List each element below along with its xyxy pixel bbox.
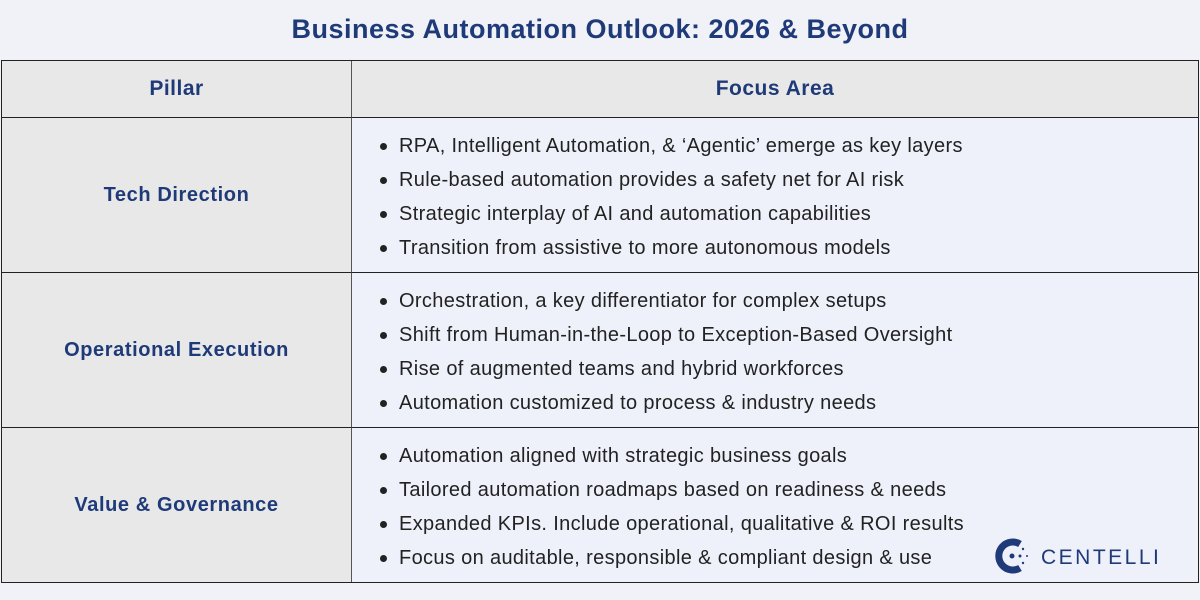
row items: value & governance: Automation aligned with strategic business goals — [399, 445, 847, 467]
row items: value & governance: Focus on auditable, responsible & compliant design & use — [399, 547, 932, 569]
row items: operational execution — [352, 273, 1198, 428]
header: pillar: Pillar — [149, 77, 204, 100]
row items: value & governance: Tailored automation roadmaps based on readiness & needs — [399, 479, 946, 501]
row label: value & governance — [2, 428, 352, 582]
row items: operational execution: Shift from Human-in-the-Loop to Exception-Based Oversight — [399, 324, 953, 346]
header: focus area: Focus Area — [716, 77, 834, 100]
row items: tech direction: Rule-based automation provides a safety net for AI risk — [399, 169, 904, 191]
row items: operational execution: Orchestration, a key differentiator for complex setups — [399, 290, 887, 312]
row label: tech direction — [2, 118, 352, 273]
logo: centelli — [995, 538, 1158, 574]
row items: tech direction — [352, 118, 1198, 273]
row items: tech direction: RPA, Intelligent Automation, & ‘Agentic’ emerge as key layers — [399, 135, 963, 157]
row items: operational execution: Automation customized to process & industry needs — [399, 392, 876, 414]
row label: value & governance: Value & Governance — [74, 494, 279, 516]
row label: tech direction: Tech Direction — [104, 184, 249, 206]
title: Business Automation Outlook: 2026 & Beyond — [291, 14, 909, 44]
row label: operational execution — [2, 273, 352, 428]
header: pillar — [2, 61, 352, 118]
row items: value & governance — [352, 428, 1198, 582]
row items: operational execution: Rise of augmented teams and hybrid workforces — [399, 358, 844, 380]
logo: centelli: CENTELLI — [1041, 546, 1158, 569]
row items: tech direction: Transition from assistive to more autonomous models — [399, 237, 891, 259]
row items: value & governance: Expanded KPIs. Include operational, qualitative & ROI results — [399, 513, 964, 535]
header: focus area — [352, 61, 1198, 118]
row items: tech direction: Strategic interplay of AI and automation capabilities — [399, 203, 871, 225]
row label: operational execution: Operational Execution — [64, 338, 289, 360]
